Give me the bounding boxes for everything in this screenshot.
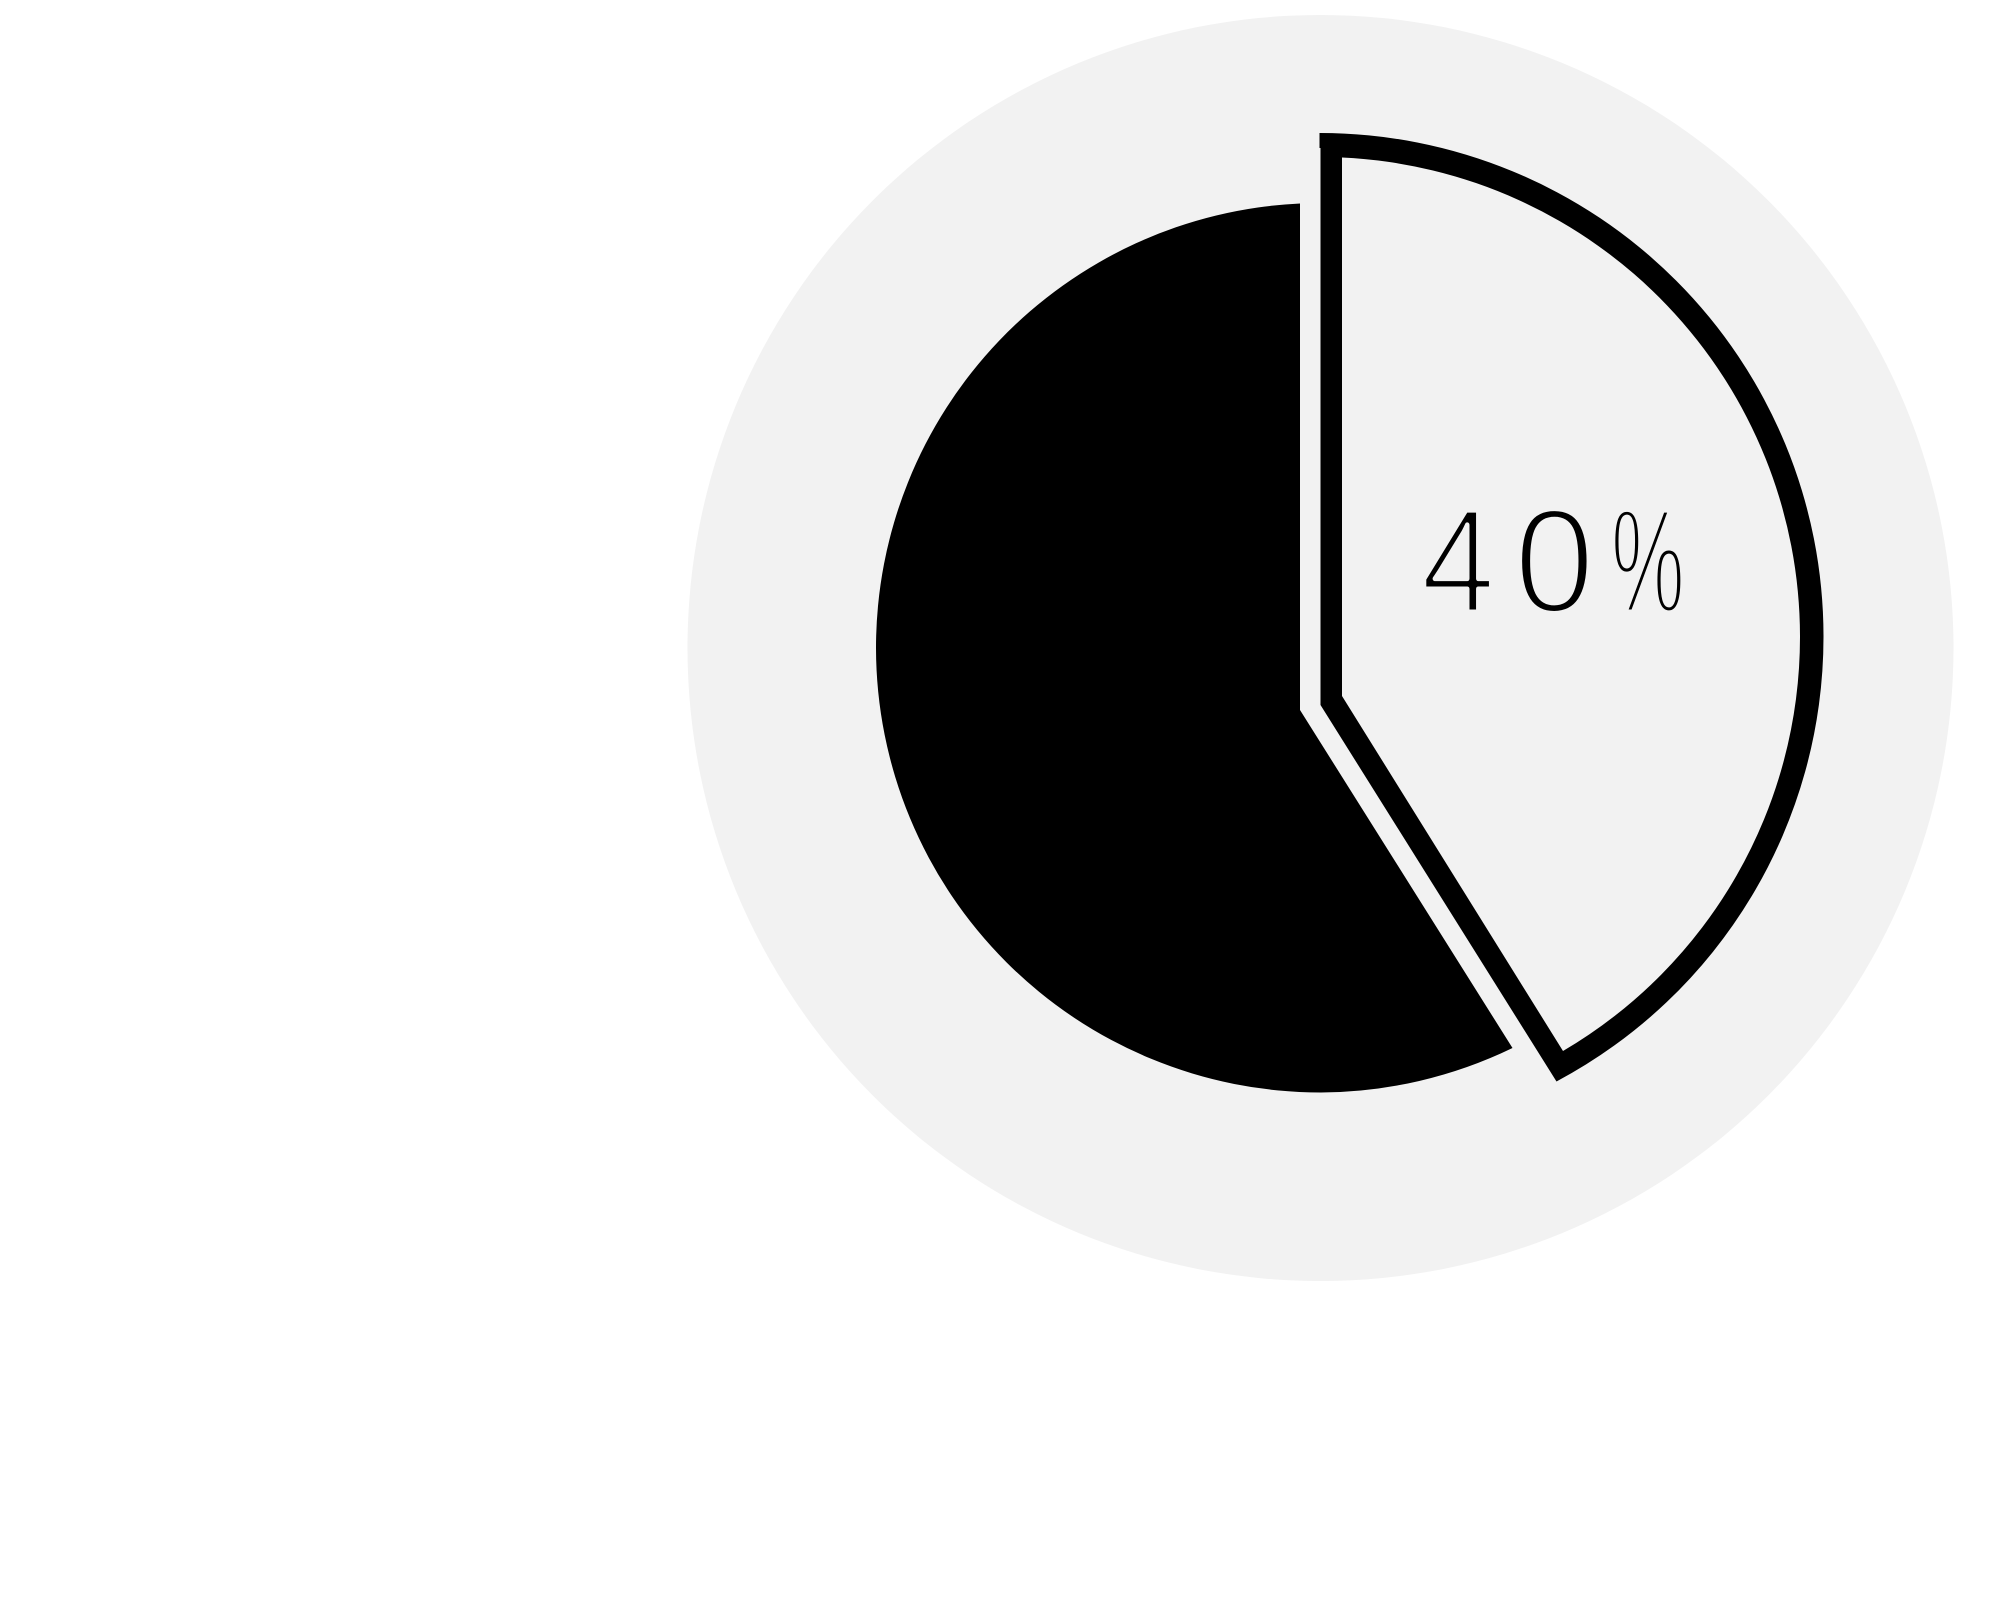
percentage label: 40%: 4 — [1421, 479, 1495, 644]
background circle — [688, 15, 1954, 1281]
pie segment: 40% outlined — [1320, 133, 1824, 1082]
percentage label: 40%: % — [1611, 479, 1685, 644]
percentage label: 40%: 0 — [1514, 479, 1595, 644]
pie segment: 60% solid black — [876, 204, 1512, 1092]
percentage label: 40% — [1421, 479, 1685, 644]
